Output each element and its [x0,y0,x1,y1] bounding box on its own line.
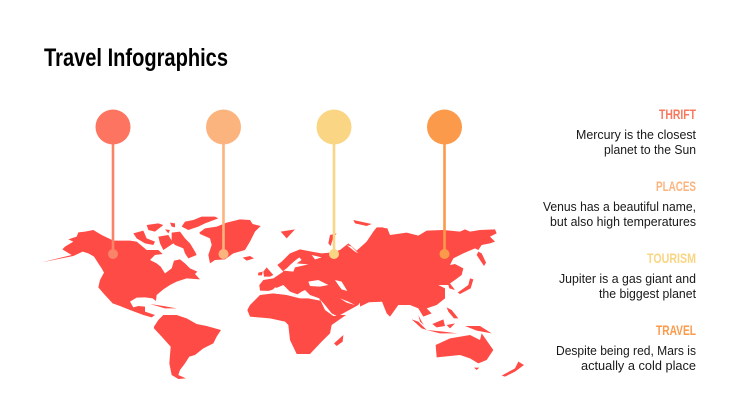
text block: thrift: THRIFT [659,106,696,122]
pin: thrift [96,110,130,259]
text block: travel: actually a cold place [581,359,696,373]
text block: travel [556,322,696,373]
text block: places: Venus has a beautiful name, [543,200,696,214]
map: Greenland and Arctic islands [133,217,261,263]
map: Southeast Asia and Oceania [281,220,524,377]
text block: tourism: the biggest planet [599,287,697,301]
text block: travel: Despite being red, Mars is [556,344,696,358]
text block: thrift [576,106,697,157]
text block: thrift: Mercury is the closest [576,128,697,142]
map: Africa [247,293,346,354]
map: Asia [360,227,497,318]
world map [42,217,524,379]
text block: places [543,178,696,229]
text block: tourism: TOURISM [647,250,696,266]
map: Europe and the Middle East [258,227,383,317]
title: Travel Infographics [44,44,228,72]
text block: thrift: planet to the Sun [604,143,696,157]
pin: tourism [316,110,352,259]
text block: tourism: Jupiter is a gas giant and [559,272,696,286]
text block: tourism [559,250,697,301]
seas cut out of the landmass [265,245,358,316]
pin: travel [427,110,462,259]
text block: places: PLACES [656,178,696,194]
text block: places: but also high temperatures [550,215,696,229]
text block: travel: TRAVEL [656,322,696,338]
pin: places [206,110,241,259]
map: North and South America [42,230,221,379]
